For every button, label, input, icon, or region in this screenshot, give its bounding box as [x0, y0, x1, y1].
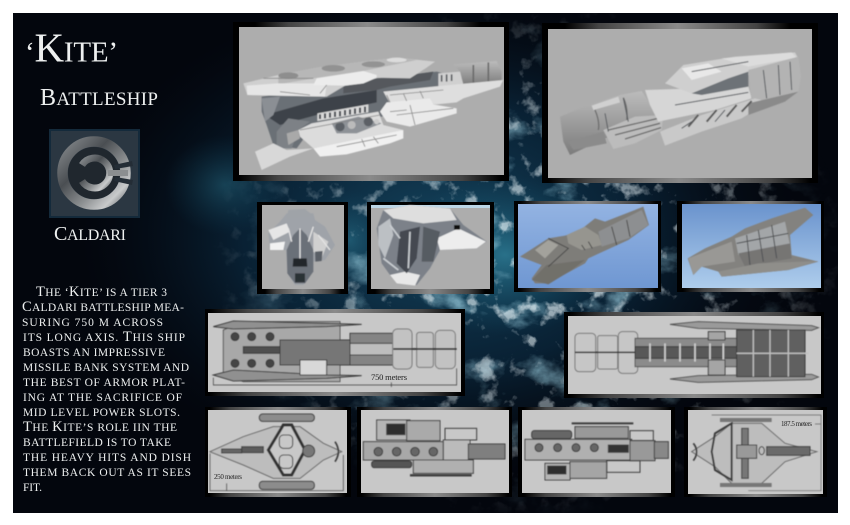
blueprint drawing 12: [692, 415, 821, 491]
panel: blueprint top view: [564, 312, 824, 398]
blueprint drawing 8: [575, 322, 818, 382]
text block: description: THE ‘KITE’ IS A TIER 3: [36, 284, 167, 300]
blueprint drawing 11: [525, 423, 668, 480]
text block: description: SURING 750 M ACROSS: [22, 317, 163, 329]
subtitle: Battleship: BATTLESHIP: [40, 85, 158, 111]
ship illustration 4: [377, 205, 487, 286]
blueprint drawing 9: [210, 414, 343, 491]
ship illustration 3: [268, 209, 335, 285]
ship illustration 2: [560, 52, 801, 155]
title: ‘KITE’: [25, 24, 118, 70]
text block: description: CALDARI BATTLESHIP MEA-: [22, 299, 184, 315]
text block: description: ITS LONG AXIS. THIS SHIP: [23, 329, 185, 345]
text block: description: THE BEST OF ARMOR PLAT-: [23, 377, 185, 389]
panel: blueprint rear view with 187.5 meters: [684, 407, 827, 497]
label: Caldari: CALDARI: [54, 223, 126, 245]
panel: ship underside view: [367, 202, 494, 294]
text block: description: ING AT THE SACRIFICE OF: [23, 392, 182, 404]
text block: description: BOASTS AN IMPRESSIVE: [23, 347, 165, 359]
ship illustration 5: [520, 207, 649, 284]
text block: description: FIT.: [23, 482, 42, 494]
text block: description: [22, 284, 191, 494]
panel: blueprint profile view right: [518, 407, 675, 497]
dimension label: 187.5 meters: 187.5 meters: [781, 420, 812, 428]
panel: blueprint front view with 250 meters: [205, 407, 351, 497]
ship illustration 1: [243, 58, 503, 170]
text block: description: THE HEAVY HITS AND DISH: [23, 452, 191, 464]
text block: description: BATTLEFIELD IS TO TAKE: [23, 437, 171, 449]
text block: description: MISSILE BANK SYSTEM AND: [23, 362, 189, 374]
panel: blueprint profile view left: [357, 407, 512, 497]
panel: ship nose view: [257, 202, 348, 294]
ship illustration 6: [688, 208, 818, 277]
dimension label: 250 meters: 250 meters: [214, 473, 242, 481]
panel: ship on blue sky, right: [677, 201, 824, 292]
panel: ship render front three-quarter: [233, 22, 509, 181]
blueprint drawing 7: [213, 321, 457, 387]
panel: ship render rear three-quarter: [542, 23, 818, 183]
icon: Caldari emblem: [49, 129, 140, 218]
text block: description: THEM BACK OUT AS IT SEES: [23, 467, 191, 479]
panel: ship on blue sky, left: [514, 201, 661, 292]
text block: description: MID LEVEL POWER SLOTS.: [23, 407, 180, 419]
dimension label: 750 meters: 750 meters: [371, 372, 407, 382]
blueprint drawing 10: [363, 420, 505, 475]
panel: blueprint side view with 750 meters: [205, 309, 465, 396]
text block: description: THE KITE’S ROLE IIN THE: [23, 419, 177, 435]
